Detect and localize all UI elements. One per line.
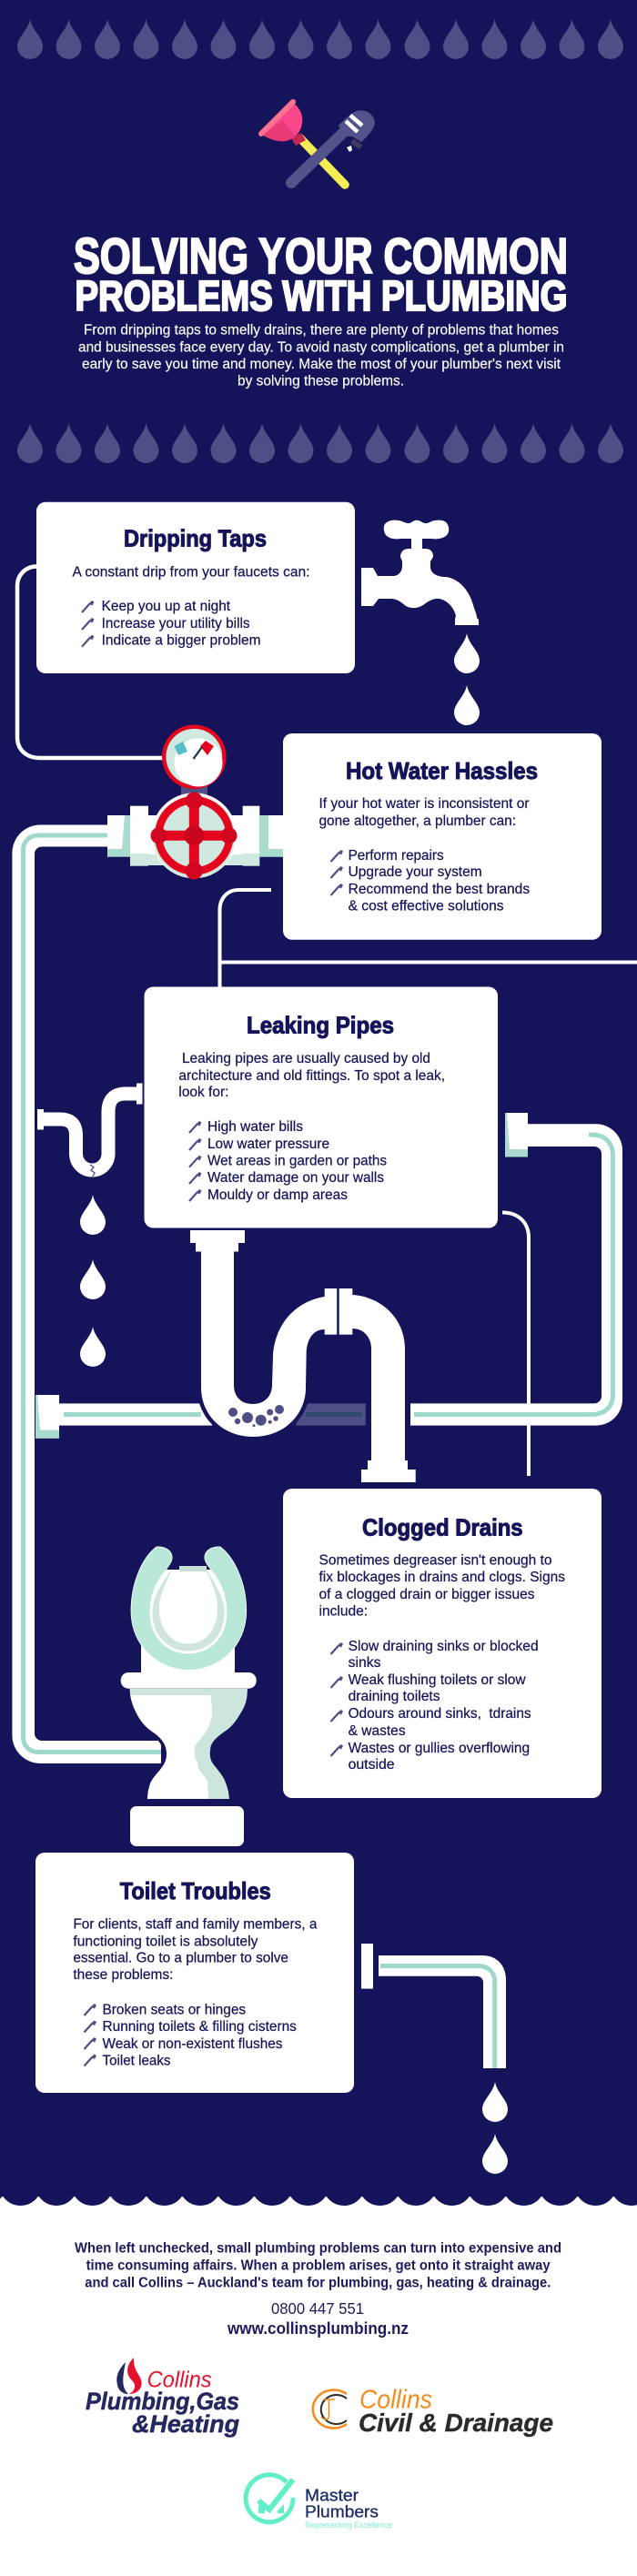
list: toilet troubles: Broken seats or hinges: [102, 2002, 246, 2017]
heading: toilet troubles: Toilet Troubles: [120, 1877, 271, 1904]
text: toilet troubles intro: functioning toilet is absolutely: [73, 1935, 258, 1950]
panel: hot water hassles: [283, 733, 602, 940]
logo: collins civil and drainage: Civil & Drainage: [359, 2409, 553, 2437]
text: clogged drains intro: Sometimes degreaser isn't enough to: [318, 1552, 551, 1569]
text: leaking pipes intro: [178, 1051, 445, 1100]
website: www.collinsplumbing.nz: [227, 2319, 409, 2338]
panel: leaking pipes: [144, 986, 498, 1228]
text: clogged drains intro: fix blockages in drains and clogs. Signs: [318, 1570, 565, 1585]
logo: collins plumbing gas heating: Collins: [147, 2367, 212, 2392]
second row of water drops: [17, 423, 623, 463]
horizontal mint pipe left: [35, 1395, 212, 1439]
text: toilet troubles intro: these problems:: [73, 1967, 173, 1983]
heading: clogged drains: Clogged Drains: [362, 1514, 523, 1541]
logo: collins plumbing gas heating: Plumbing,Gas: [86, 2388, 239, 2415]
list: clogged drains: Slow draining sinks or blocked: [349, 1639, 539, 1654]
panel: toilet troubles: [35, 1853, 354, 2093]
small s-trap with leak: [37, 1083, 142, 1367]
list: hot water: Upgrade your system: [349, 864, 482, 880]
list: leaking pipes: Low water pressure: [207, 1136, 329, 1152]
panel: dripping taps: [36, 502, 355, 673]
large mint pipe on left side: [12, 824, 161, 1763]
text: leaking pipes intro: look for:: [178, 1085, 228, 1100]
text: hot water intro: gone altogether, a plumber can:: [318, 813, 516, 829]
text: toilet troubles intro: essential. Go to a plumber to solve: [73, 1951, 288, 1965]
text: hot water intro: If your hot water is inconsistent or: [318, 796, 530, 812]
thin pipe from leaking card to clogged card: [502, 1212, 529, 1476]
intro paragraph: by solving these problems.: [238, 373, 404, 389]
intro paragraph: From dripping taps to smelly drains, there are plenty of problems that homes: [84, 322, 559, 338]
text: dripping taps intro: A constant drip from your faucets can:: [73, 564, 309, 580]
closing text: time consuming affairs. When a problem arises, get onto it straight away: [86, 2258, 551, 2273]
icon: plunger and wrench: [261, 102, 375, 185]
logo: collins plumbing gas heating: [86, 2358, 239, 2438]
list: leaking pipes: Wet areas in garden or paths: [207, 1154, 387, 1169]
list: clogged drains: & wastes: [349, 1723, 406, 1739]
text: leaking pipes intro: architecture and old fittings. To spot a leak,: [178, 1068, 445, 1084]
list: dripping taps: Increase your utility bills: [102, 616, 250, 631]
top row of water drops: [17, 19, 623, 59]
logo: master plumbers: [246, 2475, 392, 2530]
text: leaking pipes intro: Leaking pipes are usually caused by old: [182, 1051, 430, 1066]
logo: master plumbers: Representing Excellence: [305, 2520, 392, 2530]
logo: collins plumbing gas heating: &Heating: [132, 2410, 239, 2438]
list: dripping taps: Keep you up at night: [102, 599, 231, 614]
logo: master plumbers: Master: [305, 2486, 359, 2504]
list: toilet troubles: Weak or non-existent flushes: [102, 2036, 283, 2052]
text: clogged drains intro: include:: [318, 1603, 368, 1619]
list: clogged drains: [331, 1639, 539, 1773]
list: leaking pipes: High water bills: [207, 1119, 303, 1135]
list: dripping taps: [82, 599, 261, 649]
dripping faucet: [361, 520, 480, 725]
list: clogged drains: Wastes or gullies overflowing: [349, 1741, 530, 1756]
heading: hot water hassles: Hot Water Hassles: [346, 757, 538, 784]
list: toilet troubles: Toilet leaks: [102, 2053, 171, 2068]
panel: clogged drains: [283, 1489, 602, 1798]
list: hot water: Recommend the best brands: [349, 882, 530, 897]
closing text: and call Collins – Auckland's team for plumbing, gas, heating & drainage.: [85, 2275, 551, 2291]
closing text: When left unchecked, small plumbing problems can turn into expensive and: [75, 2241, 561, 2257]
intro paragraph: early to save you time and money. Make the most of your plumber's next visit: [82, 357, 561, 372]
logo: collins civil and drainage: [313, 2385, 553, 2437]
thin pipe from hot water card to leaking card: [220, 890, 637, 992]
list: clogged drains: Odours around sinks, tdrains: [349, 1706, 531, 1722]
heading: leaking pipes: Leaking Pipes: [247, 1011, 394, 1038]
toilet: [121, 1547, 257, 1846]
list: toilet troubles: [84, 2002, 297, 2068]
list: leaking pipes: [189, 1119, 387, 1203]
list: hot water: Perform repairs: [349, 848, 444, 864]
heading: dripping taps: Dripping Taps: [124, 524, 267, 551]
list: leaking pipes: Water damage on your walls: [207, 1170, 384, 1186]
thin pipe from dripping taps to gauge: [17, 566, 164, 758]
intro paragraph: and businesses face every day. To avoid nasty complications, get a plumber in: [78, 340, 564, 355]
list: hot water: [331, 848, 530, 914]
intro paragraph: [78, 322, 564, 389]
text: hot water intro: [318, 796, 530, 829]
list: dripping taps: Indicate a bigger problem: [102, 633, 261, 649]
list: clogged drains: Weak flushing toilets or slow: [349, 1672, 526, 1688]
list: toilet troubles: Running toilets & filling cisterns: [102, 2019, 297, 2035]
list: hot water: & cost effective solutions: [349, 899, 504, 914]
list: leaking pipes: Mouldy or damp areas: [207, 1187, 348, 1203]
list: clogged drains: sinks: [349, 1655, 381, 1671]
translucent section of pipe behind trap: [296, 1403, 366, 1426]
text: clogged drains intro: of a clogged drain or bigger issues: [318, 1587, 535, 1602]
horizontal mint pipe right: [410, 1113, 622, 1426]
title: [74, 227, 568, 319]
phone number: 0800 447 551: [271, 2299, 364, 2318]
bottom pipe: [361, 1944, 508, 2174]
valve and gauge: [107, 727, 285, 879]
list: clogged drains: outside: [349, 1757, 395, 1773]
logo: master plumbers: Plumbers: [305, 2503, 379, 2521]
text: toilet troubles intro: [73, 1917, 318, 1983]
text: toilet troubles intro: For clients, staff and family members, a: [73, 1917, 318, 1933]
large p-trap pipe: [190, 1230, 416, 1482]
text: clogged drains intro: [318, 1552, 565, 1619]
logo: collins civil and drainage: Collins: [359, 2385, 432, 2414]
closing text: [75, 2241, 561, 2291]
list: clogged drains: draining toilets: [349, 1689, 440, 1704]
